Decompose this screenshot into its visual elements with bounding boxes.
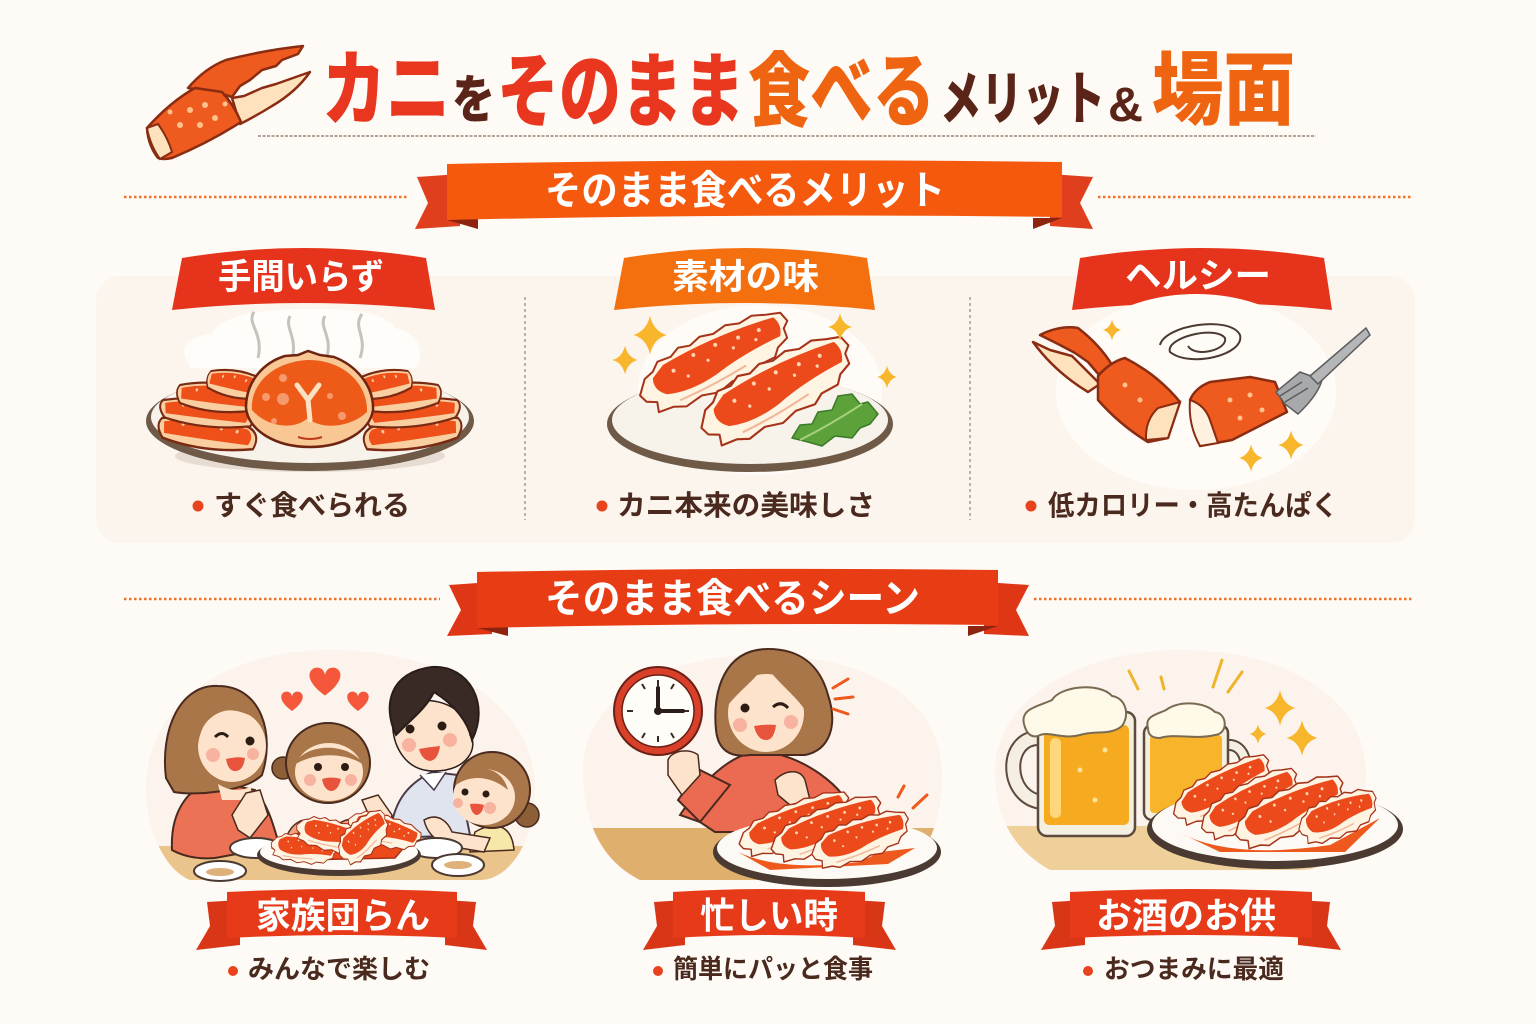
woman	[668, 649, 852, 832]
heading ribbon: scenes: そのまま食べるシーン	[545, 577, 920, 621]
bullet: すぐ食べられる: すぐ食べられる	[214, 490, 410, 521]
title	[147, 45, 1295, 159]
bullet: みんなで楽しむ: みんなで楽しむ	[248, 954, 430, 984]
bullet: 低カロリー・高たんぱく: 低カロリー・高たんぱく	[1048, 490, 1338, 521]
panel: merits background	[96, 276, 1415, 543]
title text: を	[452, 72, 495, 130]
heading ribbon: merits	[415, 160, 1093, 229]
bullet: おつまみに最適: おつまみに最適	[1104, 954, 1284, 984]
illustration: family around crab plate	[165, 667, 539, 881]
bullet: カニ本来の美味しさ: カニ本来の美味しさ	[617, 490, 875, 521]
badge: 素材の味: 素材の味	[672, 258, 819, 297]
badge: 忙しい時	[643, 889, 896, 950]
father	[390, 667, 479, 838]
badge: ヘルシー: ヘルシー	[1125, 257, 1271, 296]
illustration: beer and crab	[1013, 687, 1403, 869]
badge: 忙しい時: 忙しい時	[700, 895, 838, 936]
illustration: background and table	[580, 650, 945, 885]
badge: お酒のお供: お酒のお供	[1096, 895, 1276, 936]
beer mug 2	[1144, 703, 1246, 820]
icon: hearts	[281, 668, 369, 711]
child right	[424, 752, 539, 852]
title text: メリット	[940, 67, 1105, 132]
side plates	[194, 838, 484, 881]
illustration: crab meat on plate	[607, 305, 897, 475]
badge: ヘルシー	[1072, 248, 1332, 310]
icon: crab claw	[147, 46, 310, 159]
illustration: background and table	[990, 645, 1370, 876]
beer mug 1	[1013, 687, 1135, 836]
title text: 食べる	[748, 48, 935, 138]
title text: カニ	[322, 45, 450, 136]
scene: family gathering	[140, 645, 540, 984]
panel: no effort	[146, 248, 474, 521]
plate	[1147, 749, 1403, 869]
illustration: whole crab on plate	[146, 309, 474, 472]
title text: そのまま	[497, 48, 745, 138]
scene: busy time	[580, 649, 945, 984]
illustration: woman with clock	[668, 649, 941, 887]
heading ribbon: scenes	[447, 569, 1029, 636]
daughter center	[272, 723, 392, 845]
illustration: family background and table	[140, 645, 540, 885]
bullet: 簡単にパッと食事: 簡単にパッと食事	[673, 954, 873, 984]
heading ribbon: merits: そのまま食べるメリット	[545, 169, 945, 213]
plate	[713, 787, 941, 887]
scene: with drinks	[990, 645, 1403, 984]
title text: &	[1108, 79, 1143, 132]
badge: 家族団らん	[196, 889, 487, 950]
panel: healthy	[1026, 248, 1370, 521]
crab plate	[257, 800, 424, 876]
icon: wall clock	[614, 667, 702, 755]
title text	[322, 45, 1295, 138]
badge: 手間いらず: 手間いらず	[218, 258, 384, 297]
badge: 素材の味	[614, 248, 875, 310]
illustration: claw with fork	[1033, 294, 1370, 490]
mother	[165, 686, 280, 858]
icon: sparkles and shine lines	[1129, 660, 1317, 756]
panel: natural flavor	[596, 248, 897, 521]
badge: 家族団らん: 家族団らん	[256, 895, 430, 936]
badge: 手間いらず	[172, 248, 435, 310]
title text: 場面	[1152, 46, 1295, 135]
badge: お酒のお供	[1041, 889, 1341, 950]
icon: surprise marks	[833, 679, 927, 808]
